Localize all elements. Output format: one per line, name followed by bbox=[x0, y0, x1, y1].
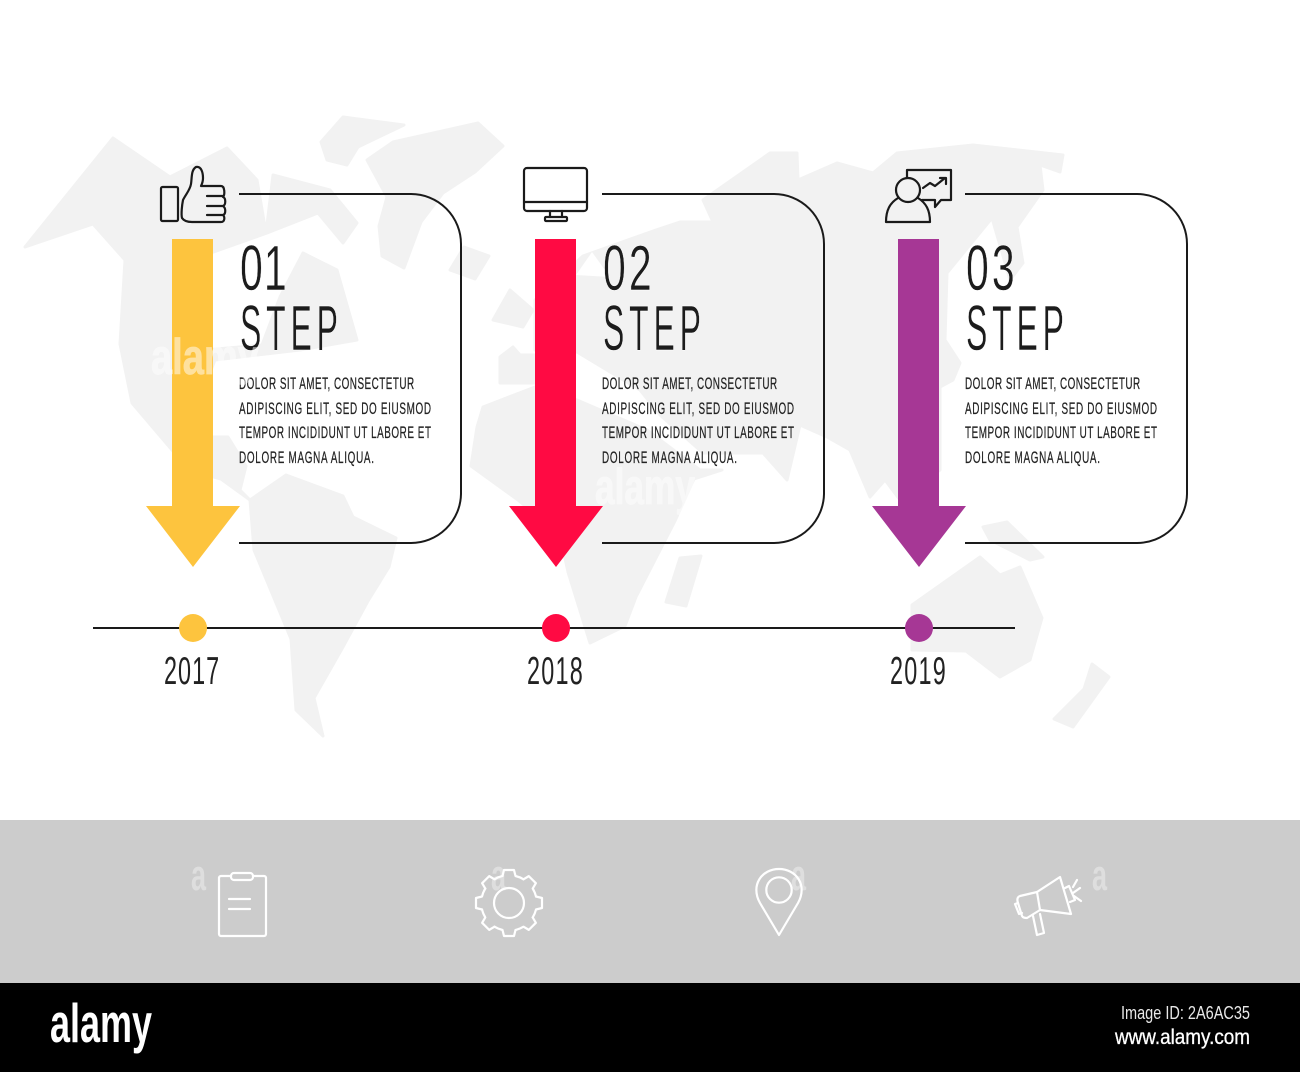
body text 3: DOLOR SIT AMET, CONSECTETUR bbox=[965, 374, 1140, 393]
marker 2019 bbox=[905, 614, 933, 642]
body text 1: DOLOR SIT AMET, CONSECTETUR bbox=[239, 374, 414, 393]
world map background bbox=[25, 117, 1109, 736]
icon band bbox=[0, 820, 1300, 983]
band watermark marks: a bbox=[791, 851, 806, 900]
footer bar bbox=[0, 983, 1300, 1072]
image id: Image ID: 2A6AC35 bbox=[1121, 1003, 1250, 1023]
body text 1: ADIPISCING ELIT, SED DO EIUSMOD bbox=[239, 399, 431, 418]
card outline 1 bbox=[239, 194, 461, 543]
body text 3 bbox=[965, 374, 1157, 467]
step 1 card bbox=[146, 167, 461, 567]
body text 2: DOLOR SIT AMET, CONSECTETUR bbox=[602, 374, 777, 393]
body text 3: DOLORE MAGNA ALIQUA. bbox=[965, 448, 1100, 467]
watermark over artwork bbox=[151, 329, 695, 515]
marker 2017 bbox=[179, 614, 207, 642]
icon: monitor bbox=[524, 168, 587, 221]
heading step: STEP bbox=[240, 292, 338, 364]
icon: thumbs up bbox=[161, 167, 225, 222]
body text 2: TEMPOR INCIDIDUNT UT LABORE ET bbox=[602, 423, 794, 442]
year 2019: 2019 bbox=[890, 649, 946, 692]
band watermark marks: a bbox=[1092, 851, 1107, 900]
timeline bbox=[93, 614, 1015, 692]
footer url: www.alamy.com bbox=[1114, 1026, 1250, 1049]
arrow: red bbox=[509, 239, 603, 567]
number 03: 03 bbox=[966, 233, 1015, 304]
number 02: 02 bbox=[603, 233, 652, 304]
icon: presenter with chart bbox=[886, 170, 951, 222]
year 2018: 2018 bbox=[527, 649, 583, 692]
arrow: purple bbox=[872, 239, 966, 567]
watermark over artwork: alamy bbox=[595, 459, 695, 515]
watermark over artwork: alamy bbox=[151, 329, 259, 385]
body text 1 bbox=[239, 374, 431, 467]
step 2 card bbox=[509, 168, 824, 567]
card outline 3 bbox=[965, 194, 1187, 543]
arrow: yellow bbox=[146, 239, 240, 567]
icon: megaphone bbox=[1015, 877, 1081, 935]
band watermark marks bbox=[191, 851, 1107, 900]
body text 2 bbox=[602, 374, 794, 467]
icon: gear bbox=[475, 869, 543, 937]
number 01: 01 bbox=[240, 233, 287, 304]
body text 2: ADIPISCING ELIT, SED DO EIUSMOD bbox=[602, 399, 794, 418]
heading step: STEP bbox=[603, 292, 701, 364]
heading step: STEP bbox=[966, 292, 1064, 364]
card outline 2 bbox=[602, 194, 824, 543]
body text 3: TEMPOR INCIDIDUNT UT LABORE ET bbox=[965, 423, 1157, 442]
icon: map pin bbox=[756, 869, 802, 935]
body text 3: ADIPISCING ELIT, SED DO EIUSMOD bbox=[965, 399, 1157, 418]
step 3 card bbox=[872, 170, 1187, 567]
band watermark marks: a bbox=[491, 851, 506, 900]
body text 1: TEMPOR INCIDIDUNT UT LABORE ET bbox=[239, 423, 431, 442]
body text 1: DOLORE MAGNA ALIQUA. bbox=[239, 448, 374, 467]
footer logo: alamy bbox=[50, 992, 152, 1054]
body text 2: DOLORE MAGNA ALIQUA. bbox=[602, 448, 737, 467]
icon: clipboard bbox=[219, 873, 266, 936]
band watermark marks: a bbox=[191, 851, 206, 900]
marker 2018 bbox=[542, 614, 570, 642]
year 2017: 2017 bbox=[164, 649, 219, 692]
map inlet bbox=[576, 252, 610, 277]
